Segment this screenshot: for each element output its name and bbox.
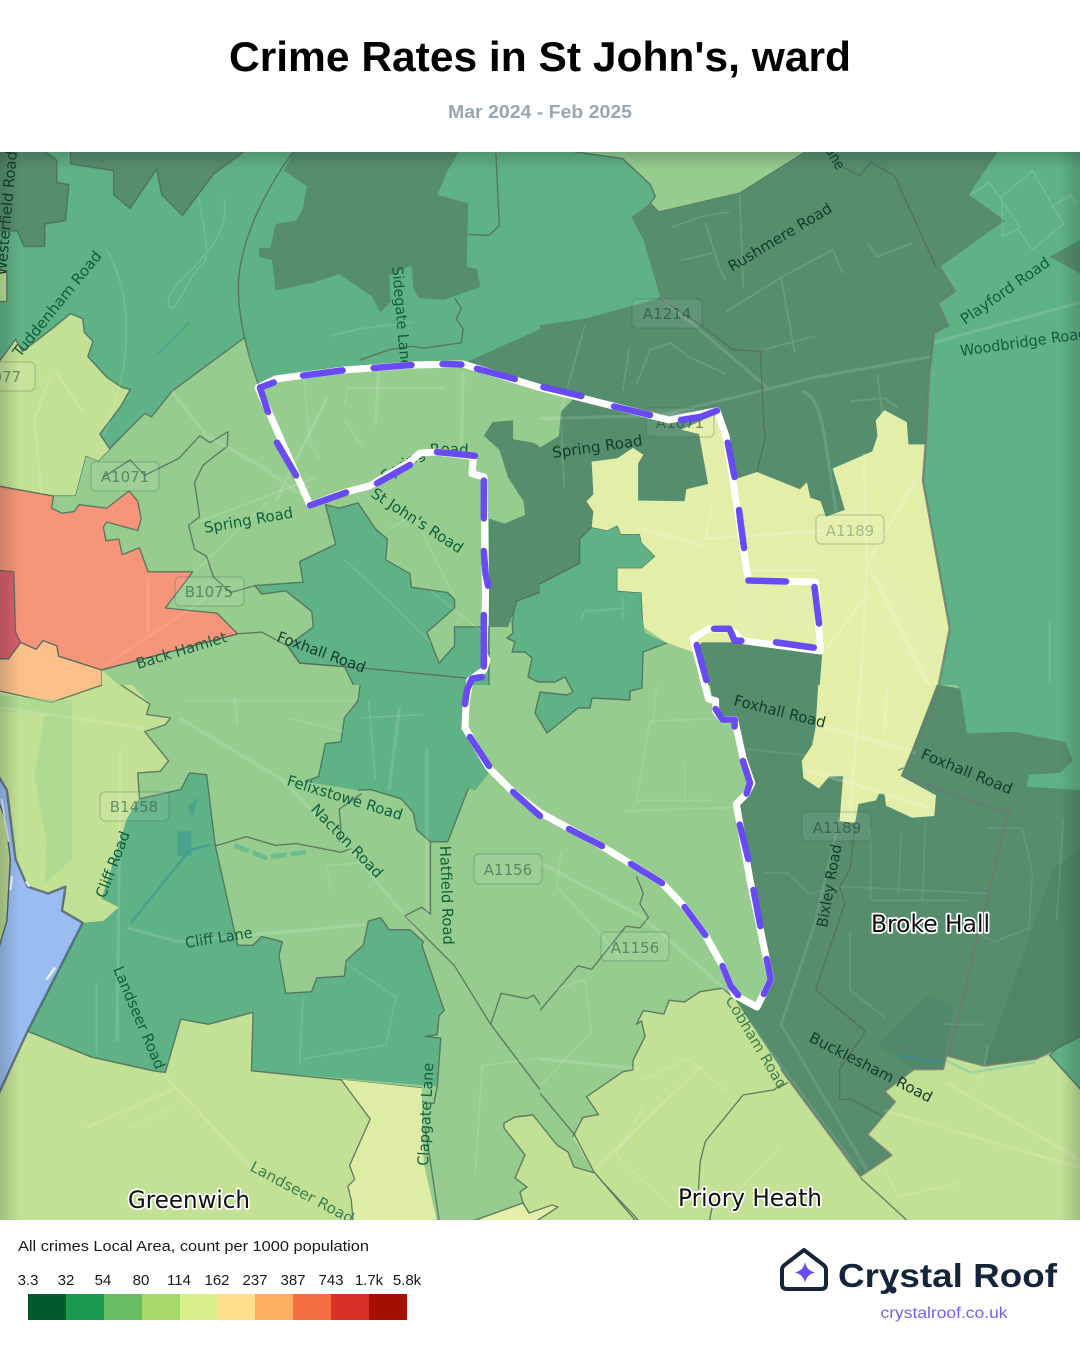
road label: Cliff Lane: Cliff Lane: [184, 924, 254, 952]
legend scale values: [18, 1272, 422, 1289]
legend scale values: 54: [95, 1272, 111, 1289]
road label: lane fragment: ane: [822, 143, 849, 173]
road label: Landseer Road north: Landseer Road: [109, 964, 169, 1072]
area: yellow-green wedge by the railway: [474, 1114, 638, 1220]
road label: Nacton Road: Nacton Road: [307, 800, 387, 882]
place label: Broke Hall: Broke Hall: [871, 910, 990, 938]
road label: Cliff Road: Cliff Road: [92, 829, 134, 900]
road shield: A1071 west: [91, 462, 159, 491]
road label: Landseer Road south: Landseer Road: [247, 1158, 357, 1228]
road label: Back Hamlet: Back Hamlet: [134, 628, 229, 673]
logo: Crystal Roof: [782, 1250, 1058, 1322]
road shield: B1458: [100, 792, 169, 821]
subtitle: date range: Mar 2024 - Feb 2025: [448, 102, 632, 122]
road shield: A1189 north: [816, 515, 884, 544]
icon: house with star: [782, 1250, 826, 1289]
road label: Cobham Road: Cobham Road: [722, 993, 791, 1092]
road label: Playford Road: Playford Road: [957, 253, 1053, 328]
road label: Tuddenham Road: Tuddenham Road: [8, 247, 106, 361]
road label: Foxhall Road east: Foxhall Road: [919, 745, 1015, 798]
title: Crime Rates in St John's, ward: [229, 33, 851, 80]
road shield: A1156 north: [474, 854, 542, 884]
road label: Hatfield Road: Hatfield Road: [436, 846, 457, 945]
boundary white outline: [258, 364, 821, 1007]
legend colour bar: [28, 1294, 407, 1320]
legend scale values: 32: [58, 1272, 74, 1289]
road label: Spring Road west: Spring Road: [203, 504, 294, 537]
road label: Sidegate Lane: Sidegate Lane: [388, 266, 415, 369]
legend: [18, 1238, 422, 1320]
legend scale values: 162: [204, 1272, 230, 1289]
map quadrant: south-west areas: [0, 670, 548, 1231]
road shield: A1189 north: A1189: [826, 522, 874, 540]
road label: Bixley Road: Bixley Road: [813, 843, 846, 929]
road shield: A1189 south: [802, 812, 871, 841]
legend scale values: 80: [133, 1272, 149, 1289]
road label: Bucklesham Road: Bucklesham Road: [806, 1029, 936, 1106]
map quadrant: north-east areas: [537, 147, 1080, 701]
legend scale values: 237: [242, 1272, 268, 1289]
legend scale values: 1.7k: [355, 1272, 384, 1289]
legend scale values: 5.8k: [393, 1272, 422, 1289]
road shield: A1156 south: A1156: [611, 939, 659, 957]
road shield: B1075: [175, 577, 244, 606]
road shield: B1458: B1458: [110, 798, 158, 816]
road label: Foxhall Road centre: Foxhall Road: [732, 691, 828, 732]
legend scale values: 743: [318, 1272, 344, 1289]
road label: Spring Road east: Spring Road: [551, 431, 644, 462]
legend scale values: 114: [167, 1272, 191, 1289]
legend title: All crimes Local Area, count per 1000 population: [18, 1238, 369, 1255]
road shield: A1214: [632, 299, 702, 328]
boundary purple dashes: [260, 364, 819, 995]
ward boundary: St John's: [258, 364, 821, 1007]
logo url: crystalroof.co.uk: [880, 1305, 1009, 1322]
road shield: A1156 south: [601, 932, 669, 961]
road shield: A1071 west: A1071: [101, 468, 149, 486]
area: mid-green block south of Spring Road: [507, 620, 667, 733]
map edge vignette: [0, 152, 1080, 1220]
road shield: A1156 north: A1156: [484, 861, 532, 879]
map quadrant: south-east areas: [537, 673, 1080, 1231]
road shield: A1189 south: A1189: [813, 819, 861, 837]
legend scale values: 387: [280, 1272, 306, 1289]
road label: St John's Road: St John's Road: [368, 484, 467, 557]
logo wordmark: Crystal Roof: [838, 1257, 1058, 1294]
road shield: A1071 east: [646, 408, 714, 437]
road shield: A1071 east: A1071: [656, 414, 704, 432]
road shield: A1077: [0, 362, 35, 391]
road shield: B1075: B1075: [185, 583, 233, 601]
road shield: A1214: A1214: [643, 305, 691, 323]
legend scale values: 3.3: [18, 1272, 38, 1289]
road label: Spring Road behind boundary: Spring Road: [381, 443, 468, 479]
place label: Priory Heath: Priory Heath: [678, 1184, 822, 1212]
road label: Foxhall Road west: Foxhall Road: [275, 628, 368, 677]
road label: Rushmere Road: Rushmere Road: [725, 199, 835, 275]
map quadrant: north-west areas: [0, 147, 548, 701]
road label: Clapgate Lane: Clapgate Lane: [414, 1062, 437, 1166]
road label: Felixstowe Road: Felixstowe Road: [285, 772, 405, 824]
place label: Greenwich: Greenwich: [128, 1186, 250, 1214]
